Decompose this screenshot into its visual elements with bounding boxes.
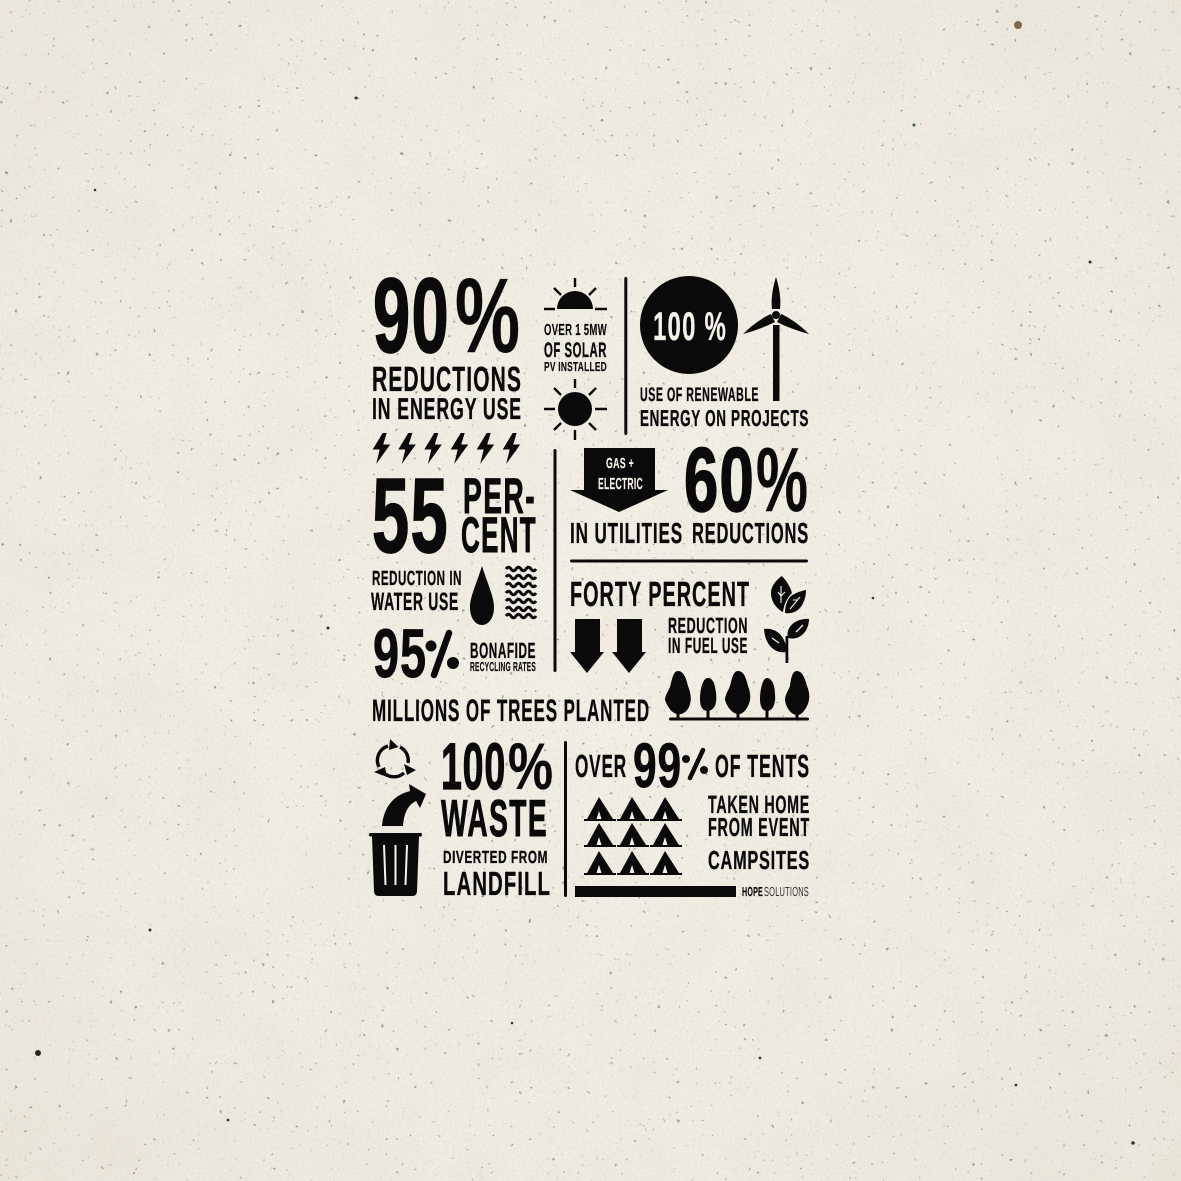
icon: percent sign [426, 633, 459, 675]
logo: hope solutions [742, 884, 809, 899]
text: over: OVER [575, 748, 627, 784]
icon: gas and electric arrow [570, 448, 668, 512]
divider: solar and renewable [624, 277, 627, 435]
badge: 100% circle: 100 % [653, 305, 727, 349]
badge: 100% circle [640, 276, 738, 374]
text: cent: CENT [461, 507, 537, 563]
icon: gas and electric arrow: ELECTRIC [598, 476, 643, 493]
icon: arrow into bin [382, 784, 426, 826]
stat: 60%: % [756, 430, 808, 531]
divider: waste and tents [564, 741, 567, 897]
icon: water drop [470, 566, 494, 625]
stat: 100%: % [508, 729, 553, 803]
text: diverted from: DIVERTED FROM [443, 847, 548, 867]
icon: wind turbine [743, 277, 809, 401]
text: from event: FROM EVENT [708, 812, 810, 842]
text: use of renewable: USE OF RENEWABLE [640, 384, 759, 406]
icon: percent sign [682, 750, 708, 778]
divider: utilities and fuel [570, 560, 808, 562]
text: PV installed: PV INSTALLED [544, 359, 607, 374]
icon: sprout [764, 619, 809, 663]
panel: water [371, 457, 537, 625]
panel: renewable energy [640, 276, 809, 431]
heading: forty percent: FORTY PERCENT [570, 575, 750, 614]
icon: tents grid [584, 797, 682, 875]
text: in utilities: IN UTILITIES [570, 518, 683, 550]
icon: water waves [506, 567, 536, 618]
icon: rising sun [544, 278, 607, 309]
stat: 90%: % [455, 257, 520, 375]
icon: down arrows [570, 619, 646, 673]
panel: utilities [570, 430, 809, 550]
panel: 90 percent energy reduction [372, 257, 522, 464]
heading: waste: WASTE [441, 790, 548, 848]
stat: 100%: 100 [441, 729, 506, 803]
logo: hope solutions: SOLUTIONS [764, 884, 809, 899]
stat: 55: 55 [372, 457, 449, 575]
text: of solar: OF SOLAR [544, 339, 607, 362]
icon: waste bin [369, 833, 422, 896]
icon: tree row [665, 671, 809, 720]
icon: gas and electric arrow: GAS + [606, 456, 634, 472]
icon: lightning bolts [373, 433, 520, 464]
panel: waste [369, 729, 553, 903]
icon: recycling arrows [374, 739, 416, 777]
panel: solar [544, 278, 607, 440]
text: per-: PER- [463, 468, 536, 524]
text: reductions: REDUCTIONS [692, 518, 809, 550]
text: in energy use: IN ENERGY USE [372, 393, 522, 426]
text: water use: WATER USE [371, 588, 459, 616]
text: reduction: REDUCTION [668, 613, 748, 638]
stat: 95: 95 [373, 615, 427, 692]
text: bonafide: BONAFIDE [470, 638, 536, 663]
stat: 60%: 60 [684, 430, 755, 531]
panel: tents [575, 731, 810, 899]
text: recycling rates: RECYCLING RATES [470, 659, 536, 674]
heading: reductions: REDUCTIONS [372, 360, 522, 399]
stat: 99: 99 [633, 731, 682, 801]
text: over 1.5MW: OVER 1 5MW [544, 322, 607, 339]
panel: recycling rates [373, 615, 536, 692]
stat: 90%: 90 [373, 257, 450, 375]
logo: hope solutions: HOPE [742, 884, 763, 899]
text: energy on projects: ENERGY ON PROJECTS [640, 405, 809, 431]
icon: leaves [771, 576, 806, 613]
text: reduction in: REDUCTION IN [372, 567, 462, 590]
text: taken home: TAKEN HOME [708, 791, 810, 819]
icon: full sun [544, 379, 607, 440]
panel: trees [372, 671, 809, 728]
text: in fuel use: IN FUEL USE [668, 633, 748, 658]
text: of tents: OF TENTS [715, 748, 810, 784]
bar: footer rule [575, 886, 736, 897]
text: landfill: LANDFILL [443, 866, 551, 903]
panel: fuel [570, 575, 809, 673]
divider: left column [554, 449, 556, 672]
heading: millions of trees planted: MILLIONS OF TREES PLANTED [372, 693, 650, 728]
text: campsites: CAMPSITES [708, 845, 810, 875]
